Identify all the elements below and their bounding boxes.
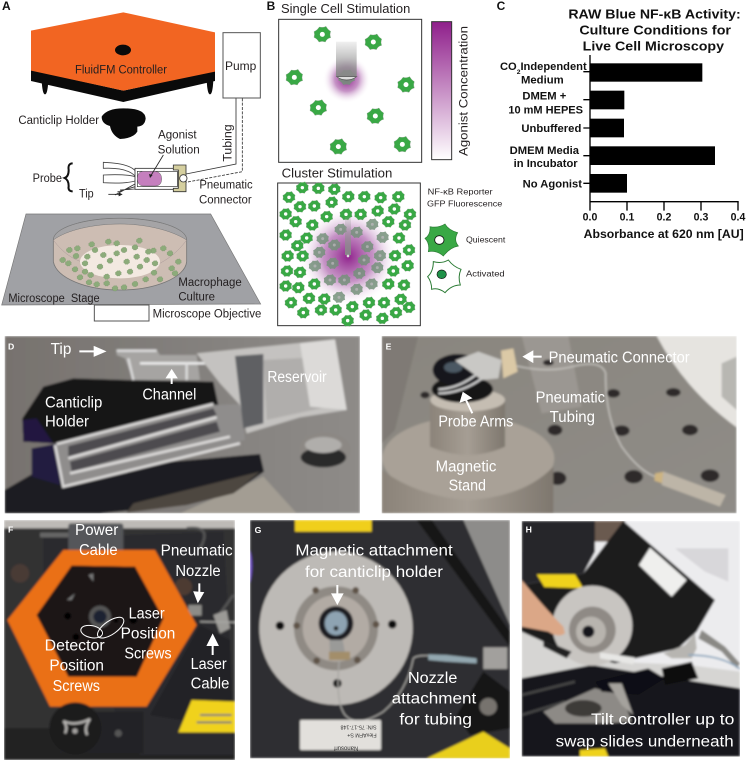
label: canticlip holder: Canticlip	[45, 394, 102, 411]
legend: NF-kB reporter: GFP Fluorescence	[427, 199, 503, 209]
x axis tick labels	[583, 212, 746, 224]
x axis tick labels: 0.1	[620, 212, 634, 224]
probe: Probe	[33, 171, 62, 185]
label: pneumatic connector: Pneumatic Connector	[549, 349, 690, 366]
stage labels: Culture	[178, 289, 215, 303]
x axis tick labels: 0.3	[694, 212, 708, 224]
probe: Agonist	[158, 128, 197, 142]
label: tilt controller	[556, 712, 734, 751]
single cell heading: Single Cell Stimulation	[281, 1, 410, 16]
label: channel: Channel	[142, 386, 196, 403]
photo: magnetic attachment plate: Nanosurf	[334, 745, 358, 751]
label: probe arms: Probe Arms	[438, 413, 514, 430]
label: tilt controller: Tilt controller up to	[591, 712, 734, 729]
label: magnetic stand: Stand	[449, 478, 486, 495]
x axis tick labels: 0.2	[657, 212, 671, 224]
label: reservoir: Reservoir	[267, 369, 327, 386]
category labels: DMEM Media	[510, 145, 580, 157]
label: power cable	[75, 522, 118, 559]
chart title: Culture Conditions for	[579, 22, 731, 37]
culture dish with macrophages	[53, 218, 187, 291]
agonist concentration colorbar	[432, 22, 470, 160]
label: magnetic attachment: for canticlip holder	[305, 564, 443, 581]
chart title	[568, 6, 741, 53]
label: channel	[142, 371, 196, 403]
single cell field	[279, 19, 422, 162]
canticlip holder	[18, 108, 146, 139]
x axis title: Absorbance at 620 nm [AU]	[584, 228, 744, 241]
pump: Pump	[225, 59, 257, 73]
label: magnetic stand	[436, 458, 497, 495]
x axis tick labels: 0.0	[583, 212, 597, 224]
photo: tilted controller	[522, 521, 740, 757]
probe: Tip	[79, 186, 94, 200]
label: laser position screws: Position	[121, 625, 175, 642]
legend: NF-kB reporter: NF-κB Reporter	[428, 186, 493, 196]
panel E: magnetic stand photo	[382, 336, 737, 513]
label: laser position screws	[121, 605, 175, 662]
label: power cable: Cable	[79, 542, 118, 559]
label: magnetic stand: Magnetic	[436, 458, 497, 475]
x axis tick labels: 0.4	[731, 212, 746, 224]
panel G: controller underside photo	[250, 520, 510, 758]
label: laser cable: Cable	[191, 676, 229, 693]
label: detector position screws: Screws	[53, 678, 100, 695]
legend: NF-kB reporter: Activated	[466, 269, 505, 279]
probe: Pneumatic	[199, 178, 253, 192]
panel F: controller top photo	[4, 520, 235, 760]
photo: magnetic attachment plate	[250, 520, 510, 758]
category labels: DMEM +	[522, 90, 566, 102]
stage labels	[8, 275, 242, 305]
panel letter G: G	[255, 525, 262, 535]
probe: Solution	[158, 142, 200, 156]
pump	[223, 33, 260, 98]
label: nozzle attachment: for tubing	[399, 711, 472, 728]
label: pneumatic nozzle	[161, 543, 233, 601]
chart title: RAW Blue NF-κB Activity:	[568, 6, 741, 21]
label: pneumatic tubing	[536, 390, 605, 426]
category labels: 10 mM HEPES	[508, 105, 583, 117]
panel letter E: E	[386, 341, 392, 351]
microscope objective: Microscope Objective	[153, 307, 262, 321]
label: pneumatic nozzle: Nozzle	[175, 563, 221, 580]
panel D: probe photo	[5, 336, 360, 513]
cluster field	[278, 182, 420, 326]
stage labels: Microscope Stage	[8, 291, 100, 305]
photo: magnetic attachment plate: S/N: 75-17-148	[340, 724, 377, 730]
label: detector position screws: Position	[49, 658, 104, 675]
label: magnetic attachment: Magnetic attachment	[295, 543, 453, 560]
FluidFM controller: FluidFM Controller	[75, 62, 167, 76]
stage labels: Macrophage	[178, 275, 242, 289]
FluidFM controller	[31, 12, 215, 102]
panel letter H: H	[526, 525, 532, 535]
label: pneumatic nozzle: Pneumatic	[161, 543, 233, 560]
label: detector position screws: Detector	[45, 637, 105, 654]
category labels: in Incubator	[514, 158, 578, 170]
tubing	[186, 98, 242, 182]
category labels: CO2Independent	[500, 61, 587, 75]
screw position ellipses	[80, 613, 127, 642]
label: nozzle attachment	[392, 670, 477, 728]
label: canticlip holder: Holder	[45, 414, 89, 431]
category labels: Unbuffered	[521, 123, 581, 135]
panel B: stimulation schematics	[267, 0, 506, 326]
probe	[33, 128, 253, 206]
panel H: tilted controller photo	[522, 521, 740, 757]
label: laser position screws: Screws	[124, 645, 172, 662]
bars	[590, 63, 715, 193]
category labels	[500, 61, 587, 191]
probe: Connector	[199, 192, 252, 206]
label: laser cable	[191, 636, 229, 693]
axes	[583, 55, 739, 211]
label: pneumatic tubing: Pneumatic	[536, 390, 605, 407]
photo: stand and tubing	[382, 336, 737, 513]
label: tip	[51, 341, 104, 358]
label: tip: Tip	[51, 341, 71, 358]
label: magnetic attachment	[295, 543, 453, 603]
tubing: Tubing	[221, 124, 235, 162]
panel C: absorbance bar chart	[497, 0, 746, 241]
microscope stage	[2, 214, 261, 305]
label: pneumatic tubing: Tubing	[550, 409, 595, 426]
label: detector position screws	[45, 637, 105, 695]
label: probe arms	[438, 393, 514, 430]
chart title: Live Cell Microscopy	[583, 38, 725, 53]
category labels: No Agonist	[523, 179, 582, 191]
label: laser position screws: Laser	[129, 605, 165, 622]
panel letter F: F	[8, 524, 13, 534]
label: tilt controller: swap slides underneath	[556, 734, 734, 751]
label: laser cable: Laser	[191, 656, 227, 673]
agonist concentration colorbar: Agonist Concentration	[456, 26, 470, 156]
canticlip holder: Canticlip Holder	[18, 113, 99, 127]
panel letter D: D	[8, 341, 14, 351]
label: canticlip holder	[45, 394, 102, 431]
legend: NF-kB reporter	[425, 186, 506, 293]
photo: probe on holder	[5, 336, 360, 513]
photo: magnetic attachment plate: FlexAFM S+	[347, 731, 377, 737]
microscope objective	[94, 305, 262, 321]
label: nozzle attachment: Nozzle	[408, 670, 457, 687]
category labels: Medium	[521, 74, 564, 86]
label: nozzle attachment: attachment	[392, 690, 477, 707]
photo: orange hexagon controller	[4, 520, 235, 760]
label: power cable: Power	[75, 522, 118, 539]
legend: NF-kB reporter: Quiescent	[466, 235, 506, 245]
cluster heading: Cluster Stimulation	[282, 166, 392, 181]
panel A: FluidFM schematic	[2, 0, 262, 321]
